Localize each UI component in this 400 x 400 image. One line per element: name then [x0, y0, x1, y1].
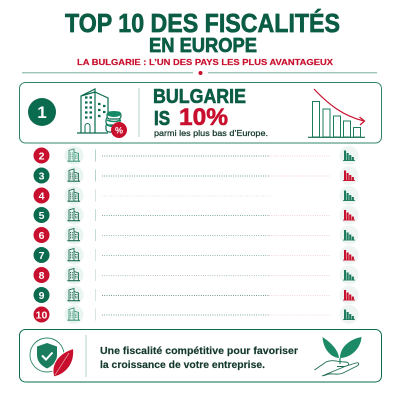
row 4: 4: [39, 190, 45, 202]
icon: building with coins and percent: [77, 89, 127, 138]
row 3: 3: [39, 170, 45, 182]
subtitle: LA BULGARIE : L’UN DES PAYS LES PLUS AVANTAGEUX: [77, 57, 333, 67]
main figure text: 10%: [179, 104, 228, 131]
row 9: 9: [39, 290, 45, 302]
row 10: 10: [36, 309, 47, 321]
row 3: [34, 166, 358, 185]
row 5: 5: [39, 210, 45, 222]
row 8: 8: [39, 270, 45, 282]
row 10: [34, 305, 358, 324]
title: [65, 8, 340, 57]
row 4: [34, 186, 358, 205]
panel: Bulgaria first place: [20, 82, 382, 143]
rank badge 1: [28, 98, 56, 126]
icon: declining bar chart with arrow: [308, 89, 365, 137]
icon: shield with check and red leaf: [30, 338, 74, 377]
row 6: [34, 226, 358, 244]
title: EN EUROPE: [149, 35, 257, 57]
main figure text: BULGARIE: [153, 86, 246, 108]
row 2: 2: [39, 150, 45, 162]
panel: conclusion: [20, 330, 382, 382]
icon: plant in open hand: [314, 337, 362, 376]
main figure text: [153, 86, 268, 138]
row 8: [34, 266, 358, 284]
main figure text: parmi les plus bas d’Europe.: [154, 128, 268, 138]
main figure text: IS: [154, 108, 170, 130]
icon: building with coins and percent: %: [115, 126, 123, 136]
conclusion text: [100, 346, 298, 371]
row 6: 6: [39, 230, 45, 242]
title: TOP 10 DES FISCALITÉS: [65, 8, 340, 38]
rank badge 1: 1: [37, 103, 47, 122]
conclusion text: la croissance de votre entreprise.: [100, 360, 265, 371]
row 7: 7: [39, 250, 45, 262]
row 2: [34, 146, 358, 165]
row 5: [34, 206, 358, 224]
row 7: [34, 246, 358, 264]
row 9: [34, 286, 358, 304]
conclusion text: Une fiscalité compétitive pour favoriser: [100, 346, 298, 357]
list: ranks 2 to 10: [34, 146, 358, 324]
